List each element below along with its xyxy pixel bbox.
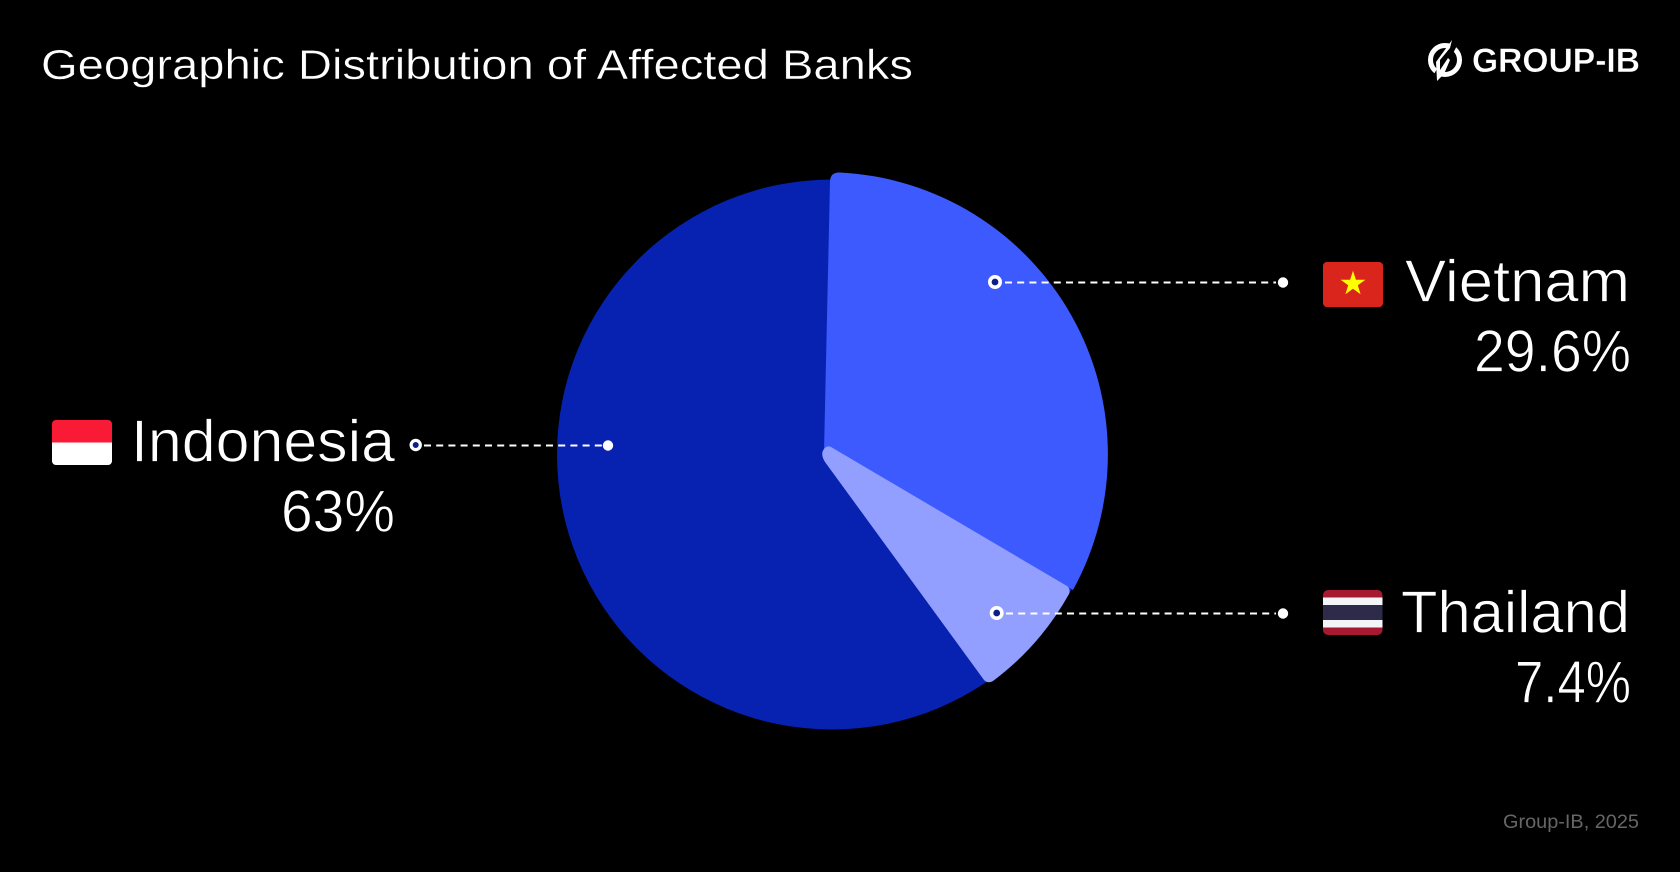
leader line bbox=[992, 608, 1288, 619]
leader line bbox=[990, 277, 1288, 288]
pie chart bbox=[557, 172, 1108, 730]
callout: Vietnam bbox=[990, 248, 1631, 384]
leader line bbox=[411, 440, 613, 451]
value: 29.6%: 29.6% bbox=[1474, 318, 1631, 384]
value: 63%: 63% bbox=[281, 478, 395, 544]
source note: Group-IB, 2025 bbox=[1503, 811, 1639, 833]
icon: Thailand flag bbox=[1323, 590, 1383, 635]
icon: logo mark bbox=[1430, 40, 1460, 81]
title: Geographic Distribution of Affected Banks bbox=[41, 41, 913, 88]
slice: Vietnam 29.6% bbox=[824, 172, 1108, 590]
logo wordmark: GROUP-IB bbox=[1472, 42, 1640, 80]
slice: Thailand 7.4% bbox=[822, 446, 1070, 682]
label: Thailand: Thailand bbox=[1401, 580, 1630, 646]
icon: Vietnam flag bbox=[1323, 262, 1383, 307]
logo: Group-IB bbox=[1430, 40, 1640, 81]
callout: Indonesia bbox=[52, 418, 614, 532]
label: Indonesia: Indonesia bbox=[131, 408, 395, 474]
value: 7.4%: 7.4% bbox=[1515, 650, 1631, 716]
slice: Indonesia 63% bbox=[557, 180, 1107, 730]
icon: Indonesia flag bbox=[52, 420, 112, 465]
callout: Thailand bbox=[990, 590, 1630, 703]
label: Vietnam: Vietnam bbox=[1405, 248, 1630, 314]
